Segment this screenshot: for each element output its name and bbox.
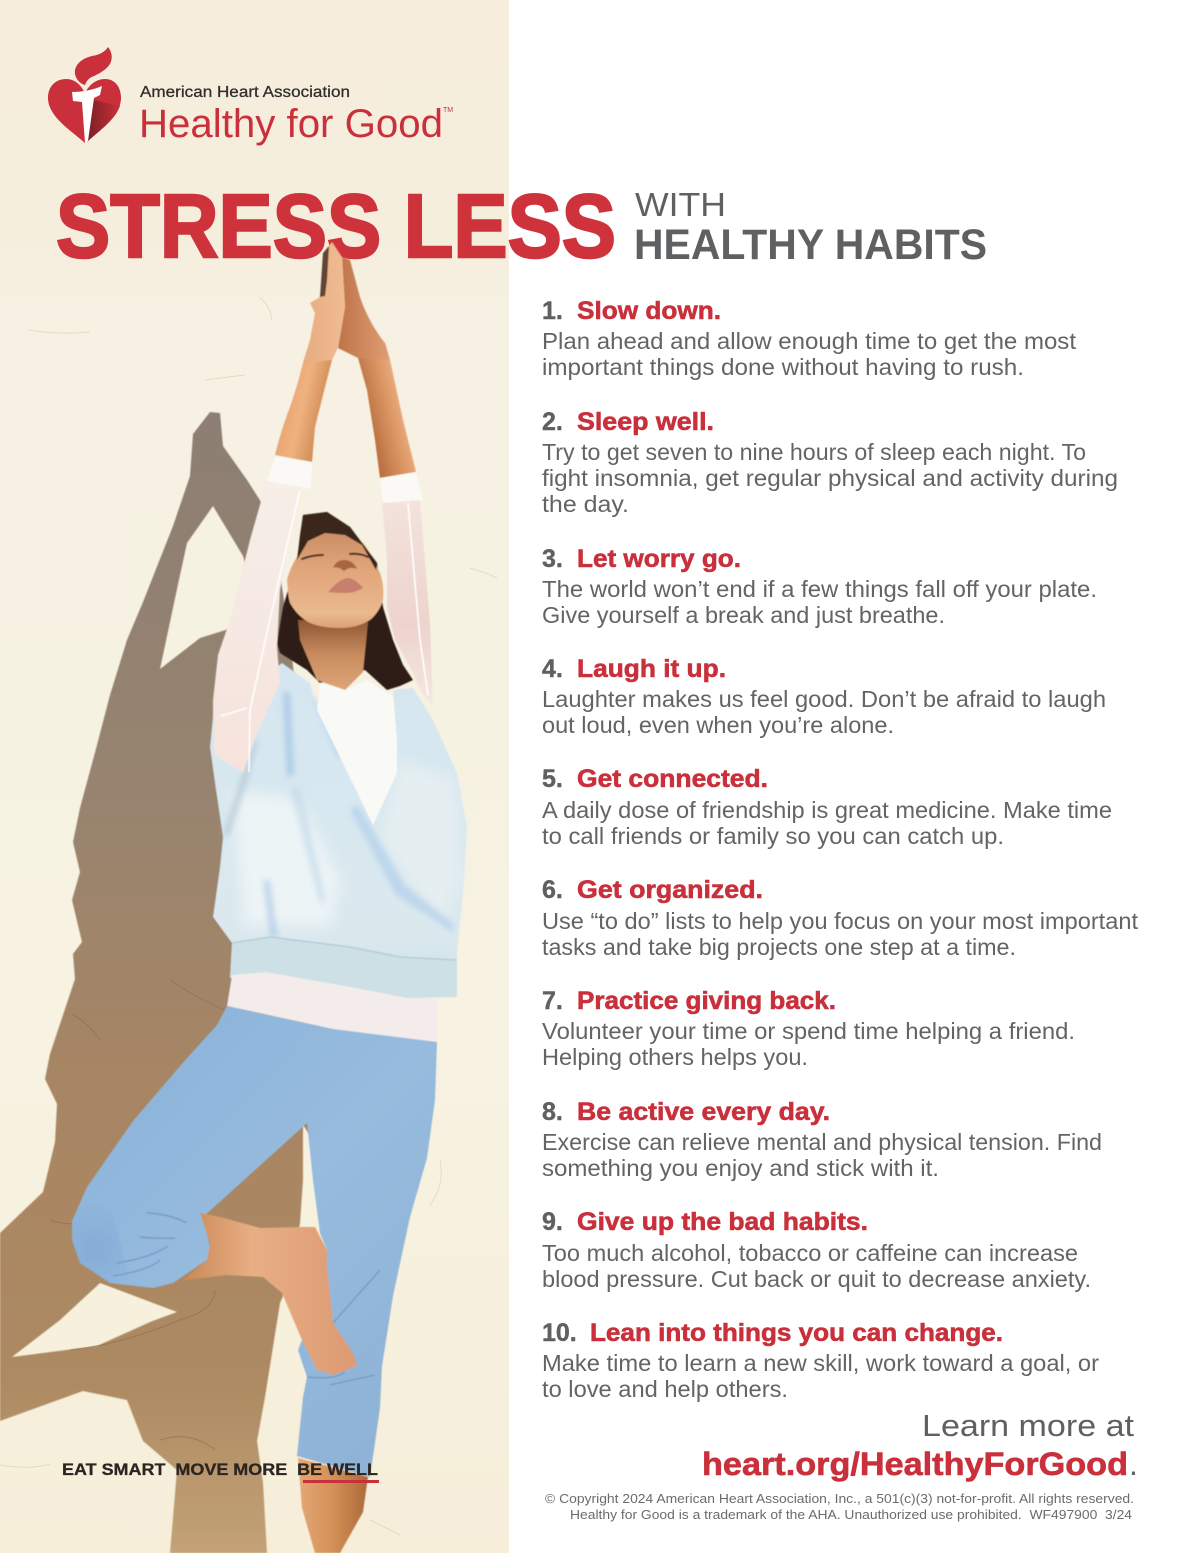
sleeve cuffs	[267, 456, 423, 503]
habit 2: Sleep well.	[577, 408, 714, 436]
habit 2: 2.	[542, 408, 563, 436]
habit 3	[542, 545, 1097, 628]
habit 4: Laugh it up.	[577, 655, 726, 683]
habit 4: Laughter makes us feel good. Don’t be afraid to laugh	[542, 686, 1106, 712]
habit 10: to love and help others.	[542, 1376, 788, 1402]
habit 3: 3.	[542, 545, 563, 573]
url: heart.org/HealthyForGood	[702, 1446, 1128, 1482]
habit 5: 5.	[542, 765, 563, 793]
title: healthy habits: HEALTHY HABITS	[634, 221, 987, 269]
habit 7	[542, 987, 1075, 1070]
eyes	[302, 554, 368, 559]
habit 2	[542, 408, 1118, 517]
pants	[72, 1006, 437, 1477]
title: with: WITH	[635, 186, 726, 223]
habit 4	[542, 655, 1106, 738]
hair back	[277, 512, 413, 690]
habit 6: tasks and take big projects one step at a time.	[542, 934, 1016, 960]
wall panel	[0, 0, 509, 1553]
title	[56, 177, 987, 277]
wordmark: American Heart Association: American Heart Association	[140, 84, 350, 101]
pants folds	[113, 1213, 380, 1385]
left sleeve	[213, 480, 302, 773]
copyright: Healthy for Good is a trademark of the AHA. Unauthorized use prohibited. WF497900 3/24	[570, 1507, 1132, 1522]
habit 5: A daily dose of friendship is great medicine. Make time	[542, 797, 1112, 823]
tagline: eat smart move more be well: EAT SMART MOVE MORE BE WELL	[62, 1460, 378, 1479]
lower leg	[298, 1458, 368, 1553]
url period: .	[1129, 1446, 1138, 1482]
habit 4: 4.	[542, 655, 563, 683]
habit 2: Try to get seven to nine hours of sleep each night. To	[542, 439, 1086, 465]
calf and foot	[183, 1213, 357, 1375]
copyright: © Copyright 2024 American Heart Association, Inc., a 501(c)(3) not-for-profit. All rights reserved.	[545, 1491, 1134, 1506]
photo background: sunlit wall with cast shadow	[0, 0, 509, 1553]
wall plaster cracks	[0, 298, 497, 1535]
habit 7: Volunteer your time or spend time helping a friend.	[542, 1018, 1075, 1044]
habit 1	[542, 297, 1077, 380]
habit 2: fight insomnia, get regular physical and activity during	[542, 465, 1118, 491]
hair bangs	[297, 512, 377, 570]
title: stress less: STRESS LESS	[56, 177, 616, 277]
logo: American Heart Association Healthy for Good	[48, 47, 453, 146]
vest folds and highlights	[223, 692, 460, 998]
habit 8: 8.	[542, 1098, 563, 1126]
photo: woman in tree pose	[72, 242, 467, 1553]
face	[287, 530, 383, 628]
neck	[298, 620, 368, 690]
habit 9: Too much alcohol, tobacco or caffeine can increase	[542, 1240, 1078, 1266]
cast shadow of woman	[0, 412, 320, 1553]
nose	[333, 560, 357, 571]
habit 6	[542, 876, 1139, 960]
habit 5	[542, 765, 1112, 849]
knee shading	[72, 1187, 130, 1283]
habit 5: Get connected.	[577, 765, 768, 793]
icon: heart and torch	[48, 47, 121, 143]
shadow cracks	[50, 980, 225, 1450]
habit 7: 7.	[542, 987, 563, 1015]
habit 10: Make time to learn a new skill, work toward a goal, or	[542, 1350, 1099, 1376]
habit 1: 1.	[542, 297, 563, 325]
habit 5: to call friends or family so you can catch up.	[542, 823, 1004, 849]
habit 8: something you enjoy and stick with it.	[542, 1155, 939, 1181]
habit 3: Let worry go.	[577, 545, 741, 573]
habit 1: Plan ahead and allow enough time to get the most	[542, 328, 1077, 354]
lips	[328, 578, 363, 593]
habit 9: blood pressure. Cut back or quit to decrease anxiety.	[542, 1266, 1091, 1292]
habit 1: important things done without having to rush.	[542, 354, 1024, 380]
habit 6: 6.	[542, 876, 563, 904]
habit 9: Give up the bad habits.	[577, 1208, 868, 1236]
habit 8	[542, 1098, 1102, 1181]
habit 10: 10.	[542, 1319, 577, 1347]
call to action	[702, 1408, 1138, 1482]
white tee	[317, 680, 397, 825]
habit 3: The world won’t end if a few things fall off your plate.	[542, 576, 1097, 602]
habits list	[542, 297, 1139, 1402]
habit 10	[542, 1319, 1099, 1402]
habit 9	[542, 1208, 1091, 1292]
vest	[210, 663, 467, 998]
habit 8: Exercise can relieve mental and physical tension. Find	[542, 1129, 1102, 1155]
habit 1: Slow down.	[577, 297, 721, 325]
habit 9: 9.	[542, 1208, 563, 1236]
trademark: TM	[443, 107, 453, 114]
habit 4: out loud, even when you’re alone.	[542, 712, 894, 738]
learn more: Learn more at	[922, 1408, 1134, 1443]
sleeve seams	[221, 490, 428, 772]
habit 2: the day.	[542, 491, 629, 517]
white undershirt hem	[227, 972, 437, 1042]
habit 8: Be active every day.	[577, 1098, 830, 1126]
habit 3: Give yourself a break and just breathe.	[542, 602, 945, 628]
habit 6: Get organized.	[577, 876, 763, 904]
habit 7: Helping others helps you.	[542, 1044, 808, 1070]
habit 10: Lean into things you can change.	[590, 1319, 1003, 1347]
habit 6: Use “to do” lists to help you focus on your most important	[542, 908, 1139, 934]
wordmark: Healthy for Good: Healthy for Good	[139, 102, 443, 146]
right sleeve	[382, 500, 433, 707]
habit 7: Practice giving back.	[577, 987, 836, 1015]
copyright	[545, 1491, 1134, 1522]
arms and hands	[275, 242, 416, 478]
